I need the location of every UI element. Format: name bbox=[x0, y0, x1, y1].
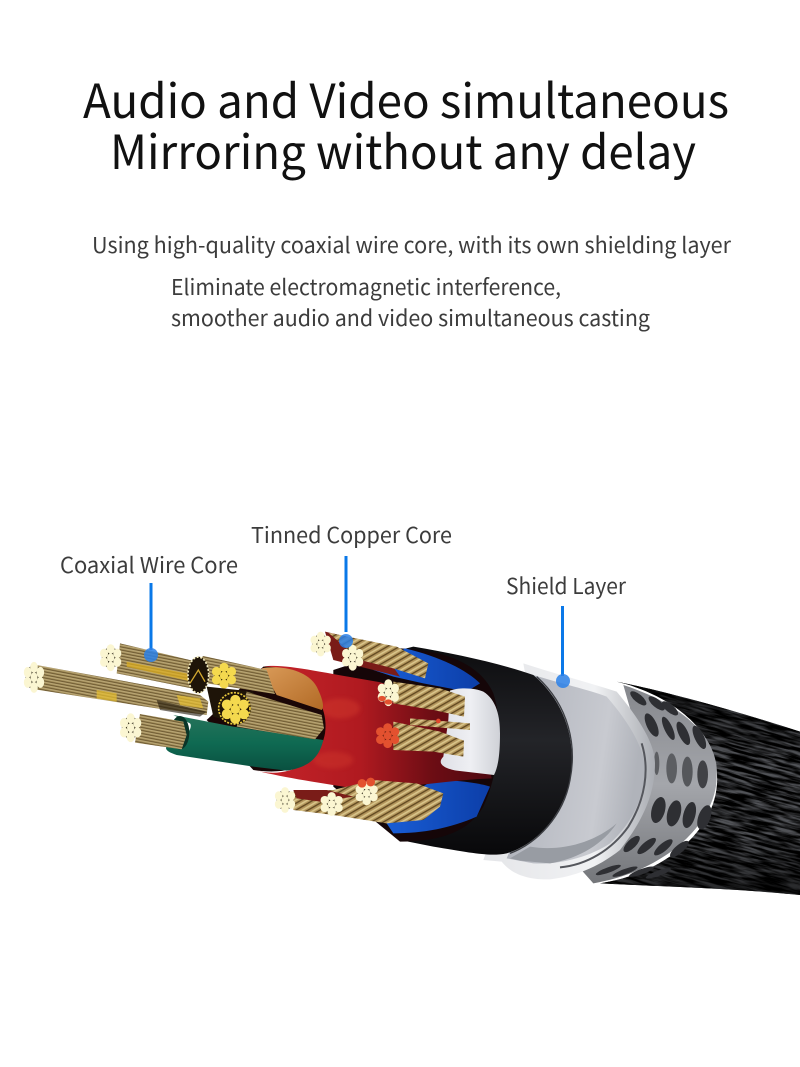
black sleeve bbox=[400, 647, 572, 855]
coaxial wire: long strand bbox=[24, 662, 208, 717]
gold dark centre bbox=[207, 687, 253, 727]
description text: Eliminate electromagnetic interference, bbox=[171, 270, 561, 302]
label: tinned copper core: Tinned Copper Core bbox=[251, 518, 452, 550]
tinned copper: top strands bbox=[311, 632, 428, 678]
description text: smoother audio and video simultaneous casting bbox=[171, 301, 651, 333]
red jacket bbox=[253, 666, 492, 789]
orange insulated wire bbox=[262, 667, 323, 710]
green insulated wire bbox=[166, 715, 323, 771]
sleeve opening interior bbox=[333, 648, 499, 842]
description text: Using high-quality coaxial wire core, with its own shielding layer bbox=[92, 228, 731, 260]
label: coaxial wire core: Coaxial Wire Core bbox=[60, 548, 238, 580]
coaxial wire: upper strand bbox=[100, 643, 275, 694]
label: tinned copper core bbox=[251, 518, 452, 648]
coaxial wire: green core strand bbox=[120, 713, 187, 749]
title bbox=[83, 63, 729, 183]
blue insulation bbox=[373, 648, 490, 833]
coaxial wire: large strand bbox=[218, 692, 324, 739]
description text bbox=[92, 228, 731, 333]
cable illustration bbox=[24, 632, 800, 895]
title: Mirroring without any delay bbox=[110, 114, 696, 183]
tinned copper: bottom strands bbox=[275, 778, 443, 823]
perforated grey shield bbox=[567, 685, 717, 883]
label: shield layer: Shield Layer bbox=[506, 569, 626, 601]
silver metal ring bbox=[483, 663, 655, 879]
label: shield layer bbox=[506, 569, 626, 688]
braided outer jacket bbox=[600, 682, 800, 895]
title: Audio and Video simultaneous bbox=[83, 63, 729, 132]
red jacket hollow bbox=[207, 667, 326, 771]
white insulator bbox=[441, 688, 500, 775]
tinned copper: middle strands bbox=[376, 679, 470, 757]
label: coaxial wire core bbox=[60, 548, 238, 662]
